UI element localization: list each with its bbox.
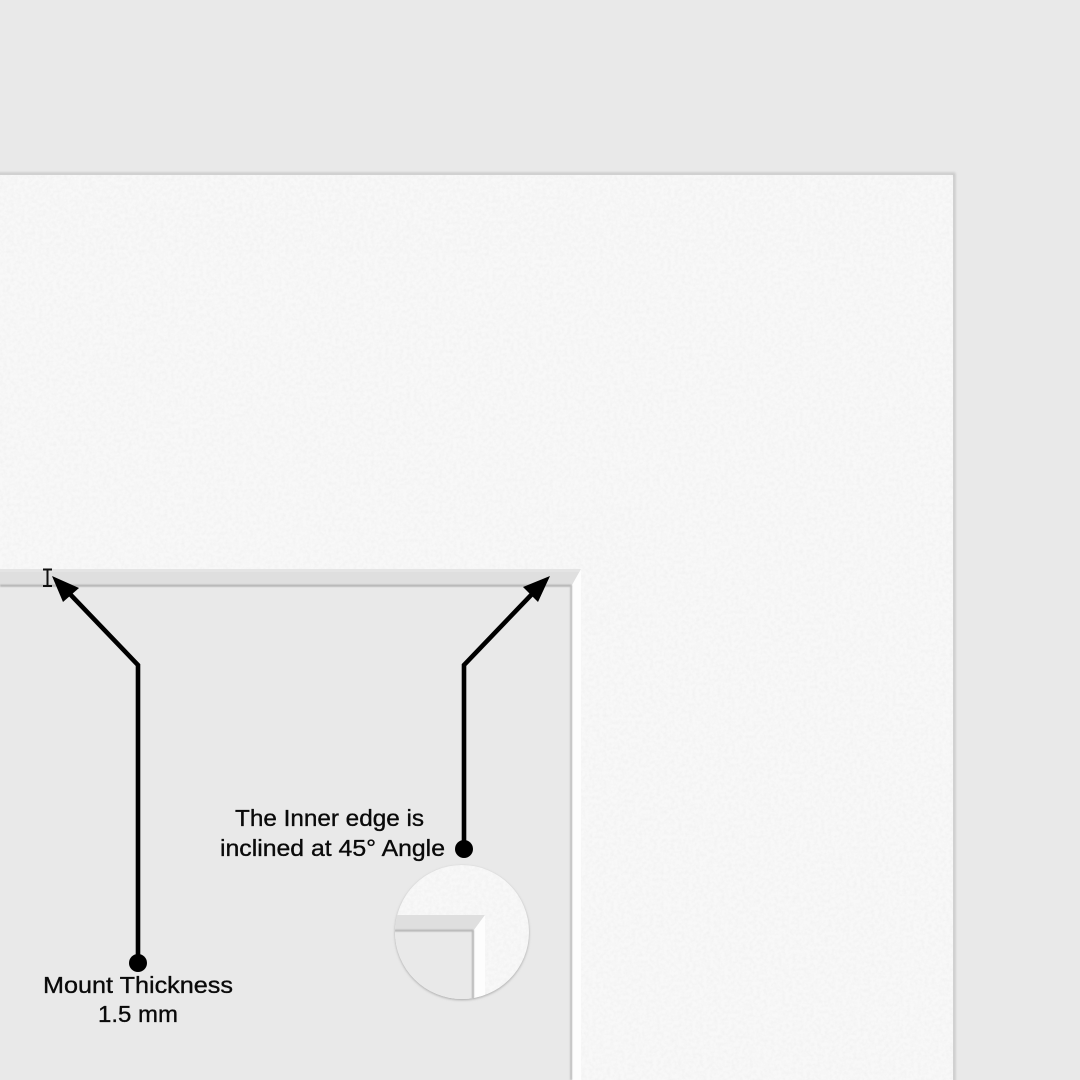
callout: magnified corner detail	[394, 864, 530, 1002]
arrow: mount thickness pointer	[52, 576, 147, 972]
text: mount thickness label	[43, 972, 233, 1027]
text: inner edge label	[220, 805, 445, 861]
text: mount thickness label: 1.5 mm	[98, 1001, 178, 1027]
panel: mount window opening	[0, 585, 572, 1080]
text: inner edge label: inclined at 45° Angle	[220, 835, 445, 861]
panel: white mount board	[0, 172, 956, 1080]
arrow: inner edge pointer	[455, 576, 550, 858]
text: inner edge label: The Inner edge is	[235, 805, 424, 831]
top bevelled inner edge	[0, 569, 581, 587]
text: mount thickness label: Mount Thickness	[43, 972, 233, 998]
icon: thickness marker	[43, 570, 52, 586]
right bevelled inner edge	[570, 569, 581, 1080]
